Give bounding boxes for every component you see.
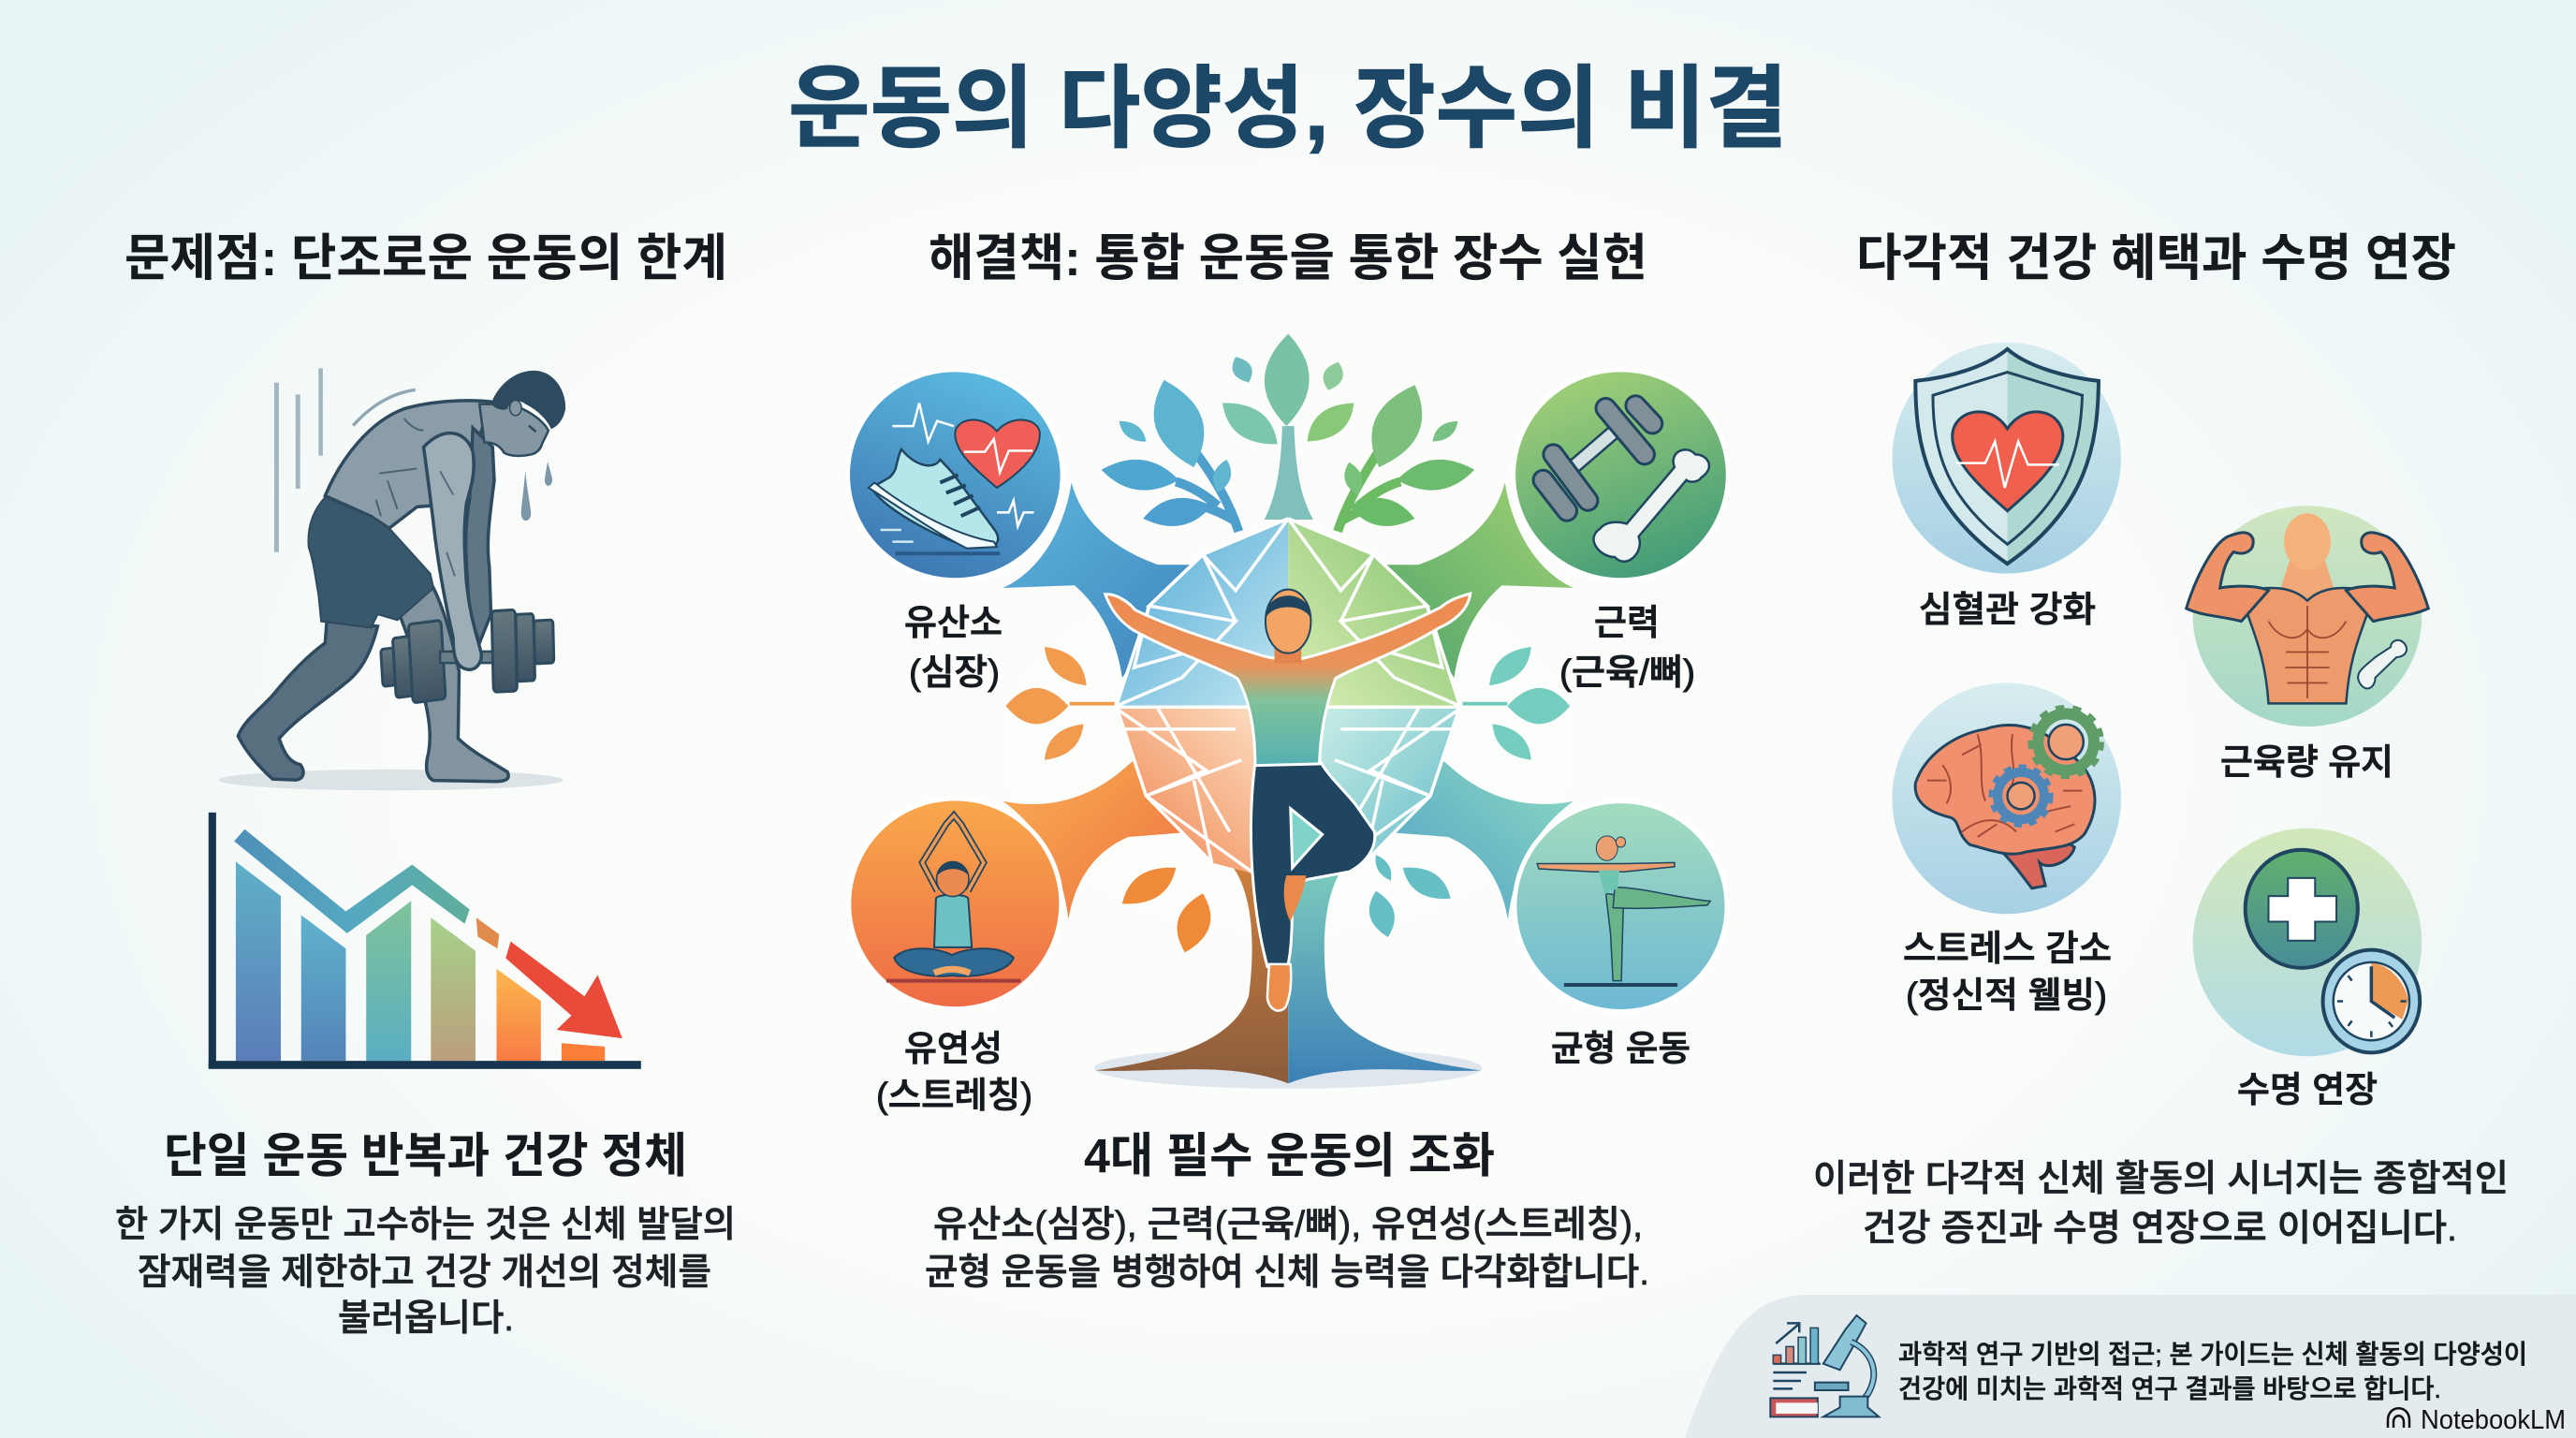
label: flexibility [876, 1030, 1032, 1116]
icon: longevity plus and clock [2193, 829, 2422, 1056]
icon: microscope, chart and book [1770, 1315, 1879, 1416]
subheading: solution: 4대 필수 운동의 조화 [1084, 1129, 1495, 1182]
branch: cardio [1003, 483, 1206, 678]
label: strength [1559, 604, 1695, 693]
label: cardiovascular: 심혈관 강화 [1919, 591, 2096, 630]
heading: problem: 문제점: 단조로운 운동의 한계 [124, 230, 727, 286]
label: flexibility: (스트레칭) [876, 1077, 1032, 1116]
body text: problem: 잠재력을 제한하고 건강 개선의 정체를 [138, 1253, 711, 1293]
label: strength: 근력 [1594, 604, 1660, 643]
branch: flexibility [1003, 750, 1193, 919]
chart: declining health bars [209, 813, 641, 1069]
subheading: problem: 단일 운동 반복과 건강 정체 [164, 1129, 687, 1182]
branch: balance [1383, 750, 1573, 919]
panel: problem [115, 230, 736, 1339]
heading: solution: 해결책: 통합 운동을 통한 장수 실현 [929, 230, 1647, 286]
panel: solution [848, 230, 1728, 1293]
body text: benefits: 이러한 다각적 신체 활동의 시너지는 종합적인 [1813, 1159, 2509, 1199]
footer text [1898, 1340, 2527, 1403]
body text: solution: 균형 운동을 병행하여 신체 능력을 다각화합니다. [925, 1253, 1649, 1293]
body text: problem: 한 가지 운동만 고수하는 것은 신체 발달의 [115, 1205, 736, 1245]
body text: benefits [1813, 1159, 2509, 1249]
body text: solution [925, 1205, 1649, 1293]
tree top branches and leaves [1102, 333, 1474, 532]
panel: benefits [1813, 230, 2509, 1249]
footer text: 과학적 연구 기반의 접근; 본 가이드는 신체 활동의 다양성이 [1898, 1340, 2527, 1369]
footer text: 건강에 미치는 과학적 연구 결과를 바탕으로 합니다. [1898, 1374, 2441, 1403]
icon: brain with gears [1892, 682, 2121, 914]
icon: strength circle [1514, 370, 1728, 580]
label: stress [1903, 930, 2112, 1016]
icon: flexibility circle [849, 799, 1061, 1009]
label: strength: (근육/뼈) [1559, 653, 1695, 693]
icon: cardio circle [848, 370, 1062, 580]
label: cardio: (심장) [909, 653, 1000, 693]
icon: shield heart [1892, 343, 2121, 574]
icon: balance circle [1515, 801, 1727, 1011]
logo: NotebookLM: NotebookLM [2421, 1405, 2566, 1435]
label: stress: 스트레스 감소 [1903, 930, 2112, 969]
branch: strength [1370, 483, 1573, 678]
side leaves [1006, 647, 1570, 952]
label: cardio: 유산소 [904, 604, 1003, 643]
diagram: exercise tree [848, 333, 1728, 1089]
label: stress: (정신적 웰빙) [1906, 976, 2107, 1016]
body text: problem [115, 1205, 736, 1339]
panel: footer note [1685, 1295, 2576, 1438]
polyhedron [1117, 519, 1460, 883]
label: muscle mass: 근육량 유지 [2220, 743, 2393, 783]
label: flexibility: 유연성 [904, 1030, 1003, 1069]
label: balance: 균형 운동 [1551, 1030, 1690, 1069]
heading: benefits: 다각적 건강 혜택과 수명 연장 [1856, 230, 2456, 286]
label: longevity: 수명 연장 [2237, 1071, 2378, 1110]
icon: exhausted man lifting dumbbells [218, 368, 565, 790]
figure: balancing person [1107, 590, 1469, 1009]
label: cardio [904, 604, 1003, 693]
body text: benefits: 건강 증진과 수명 연장으로 이어집니다. [1863, 1209, 2457, 1249]
trunk [1095, 858, 1481, 1083]
body text: solution: 유산소(심장), 근력(근육/뼈), 유연성(스트레칭), [933, 1205, 1643, 1245]
title: 운동의 다양성, 장수의 비결 [788, 59, 1788, 159]
icon: muscular torso [2187, 506, 2428, 726]
body text: problem: 불러옵니다. [338, 1299, 514, 1339]
